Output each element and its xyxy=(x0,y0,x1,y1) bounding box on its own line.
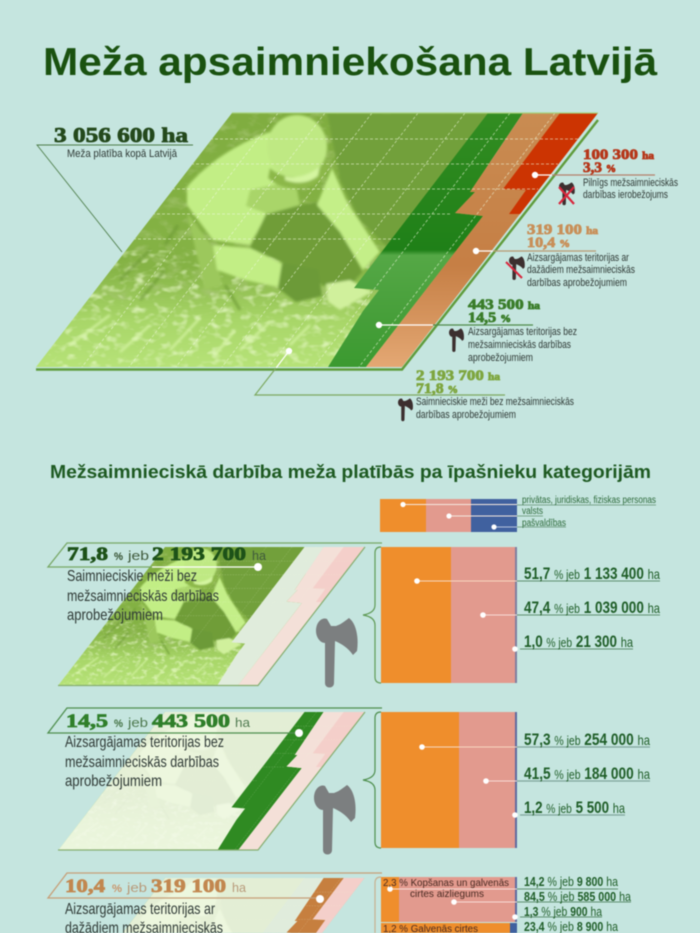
panel: protected without restrictions: 14,5 xyxy=(66,711,108,732)
band: protected without restrictions xyxy=(328,113,523,367)
panel: protected with restrictions: 319 100 xyxy=(151,876,226,897)
brace xyxy=(363,547,381,683)
photo thumbnail xyxy=(55,545,311,688)
icon: axe with slash xyxy=(506,256,525,280)
legend bar: valsts xyxy=(522,506,543,517)
panel: commercial forests xyxy=(48,543,382,688)
bar: ownership of commercial forests: 47,4 % jeb 1 039 000 ha xyxy=(524,598,660,617)
callout: 100 300 ha xyxy=(532,147,678,205)
callout: 319 100 ha: Aizsargājamas teritorijas ar xyxy=(527,252,629,264)
brace xyxy=(375,877,381,933)
band: protected with restrictions xyxy=(366,112,560,368)
panel: protected without restrictions: ha xyxy=(235,715,251,730)
panel: commercial forests: ha xyxy=(252,548,267,563)
callout: 2 193 700 ha xyxy=(255,348,574,421)
callout: 319 100 ha: dažādiem mežsaimnieciskās xyxy=(527,264,635,276)
main forest parallelogram chart xyxy=(30,110,598,372)
callout: 443 500 ha: mežsaimnieciskās darbības xyxy=(468,339,571,351)
icon: crossed axe xyxy=(559,182,575,205)
callout: 443 500 ha: 14,5 % xyxy=(468,310,511,326)
faded photo thumbnail xyxy=(55,710,311,853)
icon: axe xyxy=(449,328,464,352)
panel: protected with restrictions: ha xyxy=(232,880,247,895)
callout: 2 193 700 ha: 2 193 700 ha xyxy=(416,368,500,384)
bar: ownership of commercial forests: 1,0 % jeb 21 300 ha xyxy=(524,632,633,651)
bar: ownership of protected with restrictions: 2,3 % Kopšanas un galvenās xyxy=(383,878,509,889)
panel: commercial forests: jeb xyxy=(127,548,149,563)
dashed grid xyxy=(82,113,578,367)
panel: protected with restrictions xyxy=(48,873,382,933)
panel: protected without restrictions xyxy=(48,708,382,854)
panel: protected with restrictions: 10,4 xyxy=(65,876,106,897)
panel: commercial forests: % xyxy=(114,551,123,563)
callout: 319 100 ha: 319 100 ha xyxy=(527,222,598,238)
callout: 443 500 ha: Aizsargājamas teritorijas bez xyxy=(468,326,577,338)
panel: commercial forests: aprobežojumiem xyxy=(67,607,163,624)
legend bar: privātas, juridiskas, fiziskas personas xyxy=(522,495,656,506)
icon: grey axe xyxy=(316,618,358,688)
callout: 100 300 ha: darbības ierobežojums xyxy=(583,189,668,201)
panel: commercial forests: mežsaimnieciskās darbības xyxy=(67,588,219,605)
callout: 443 500 ha: 443 500 ha xyxy=(468,297,540,313)
panel: commercial forests: 71,8 xyxy=(67,544,108,565)
panel: protected without restrictions: 443 500 xyxy=(152,711,230,732)
bar: ownership of protected with restrictions: 14,2 % jeb 9 800 ha xyxy=(524,874,619,889)
callout: 2 193 700 ha: Saimnieciskie meži bez mežsaimnieciskās xyxy=(416,396,574,408)
callout: 2 193 700 ha: darbības aprobežojumiem xyxy=(416,409,516,421)
bar: ownership of protected with restrictions: cirtes aizliegums xyxy=(410,889,484,900)
parallelogram edge xyxy=(232,112,598,114)
panel: protected without restrictions: Aizsargājamas teritorijas bez xyxy=(65,734,224,751)
callout: total area: Meža platība kopā Latvijā xyxy=(67,148,178,160)
bar: ownership of protected without restrictions: 41,5 % jeb 184 000 ha xyxy=(524,764,650,783)
faded photo thumbnail xyxy=(124,878,304,933)
bar: ownership of commercial forests xyxy=(381,547,660,683)
panel: protected without restrictions: % xyxy=(114,718,123,730)
callout: total area: 3 056 600 ha xyxy=(54,123,189,147)
panel: protected with restrictions: Aizsargājamas teritorijas ar xyxy=(65,901,216,918)
bar: ownership of protected without restrictions: 57,3 % jeb 254 000 ha xyxy=(524,730,650,749)
bar: ownership of protected with restrictions xyxy=(381,874,632,933)
callout: 100 300 ha: 100 300 ha xyxy=(583,147,654,163)
panel: commercial forests: 2 193 700 xyxy=(152,544,246,565)
bar: ownership of protected without restrictions: 1,2 % jeb 5 500 ha xyxy=(524,798,625,817)
bar: ownership of commercial forests: 51,7 % jeb 1 133 400 ha xyxy=(524,564,660,583)
callout: total area xyxy=(37,123,193,252)
panel: protected without restrictions: jeb xyxy=(127,715,148,730)
panel: commercial forests: Saimnieciskie meži bez xyxy=(67,568,197,585)
bar: ownership of protected without restrictions xyxy=(381,712,650,848)
callout: 443 500 ha: aprobežojumiem xyxy=(468,352,533,364)
callout: 319 100 ha xyxy=(473,222,635,289)
panel: protected without restrictions: aprobežojumiem xyxy=(65,773,162,790)
callout: 319 100 ha: 10,4 % xyxy=(527,235,570,251)
panel: protected with restrictions: jeb xyxy=(126,880,147,895)
photo of forest worker xyxy=(30,110,500,372)
bar: ownership of protected with restrictions: 84,5 % jeb 585 000 ha xyxy=(524,889,632,904)
panel: protected with restrictions: % xyxy=(112,883,122,895)
bar: ownership of protected with restrictions: 1,3 % jeb 900 ha xyxy=(524,904,603,919)
callout: 443 500 ha xyxy=(376,297,577,364)
title: Meža apsaimniekošana Latvijā xyxy=(43,41,657,84)
panel: protected without restrictions: mežsaimnieciskās darbības xyxy=(65,754,219,771)
brace xyxy=(363,712,381,848)
callout: 319 100 ha: darbības aprobežojumiem xyxy=(527,277,627,289)
icon: grey axe xyxy=(314,785,356,854)
section heading: Mežsaimnieciskā darbība meža platībās pa īpašnieku kategorijām xyxy=(50,462,651,482)
callout: 2 193 700 ha: 71,8 % xyxy=(416,381,458,397)
icon: axe xyxy=(398,398,413,421)
callout: 100 300 ha: 3,3 % xyxy=(583,160,616,176)
band: complete restriction xyxy=(503,113,598,214)
legend bar xyxy=(380,495,656,532)
legend bar: pašvaldības xyxy=(522,518,566,529)
